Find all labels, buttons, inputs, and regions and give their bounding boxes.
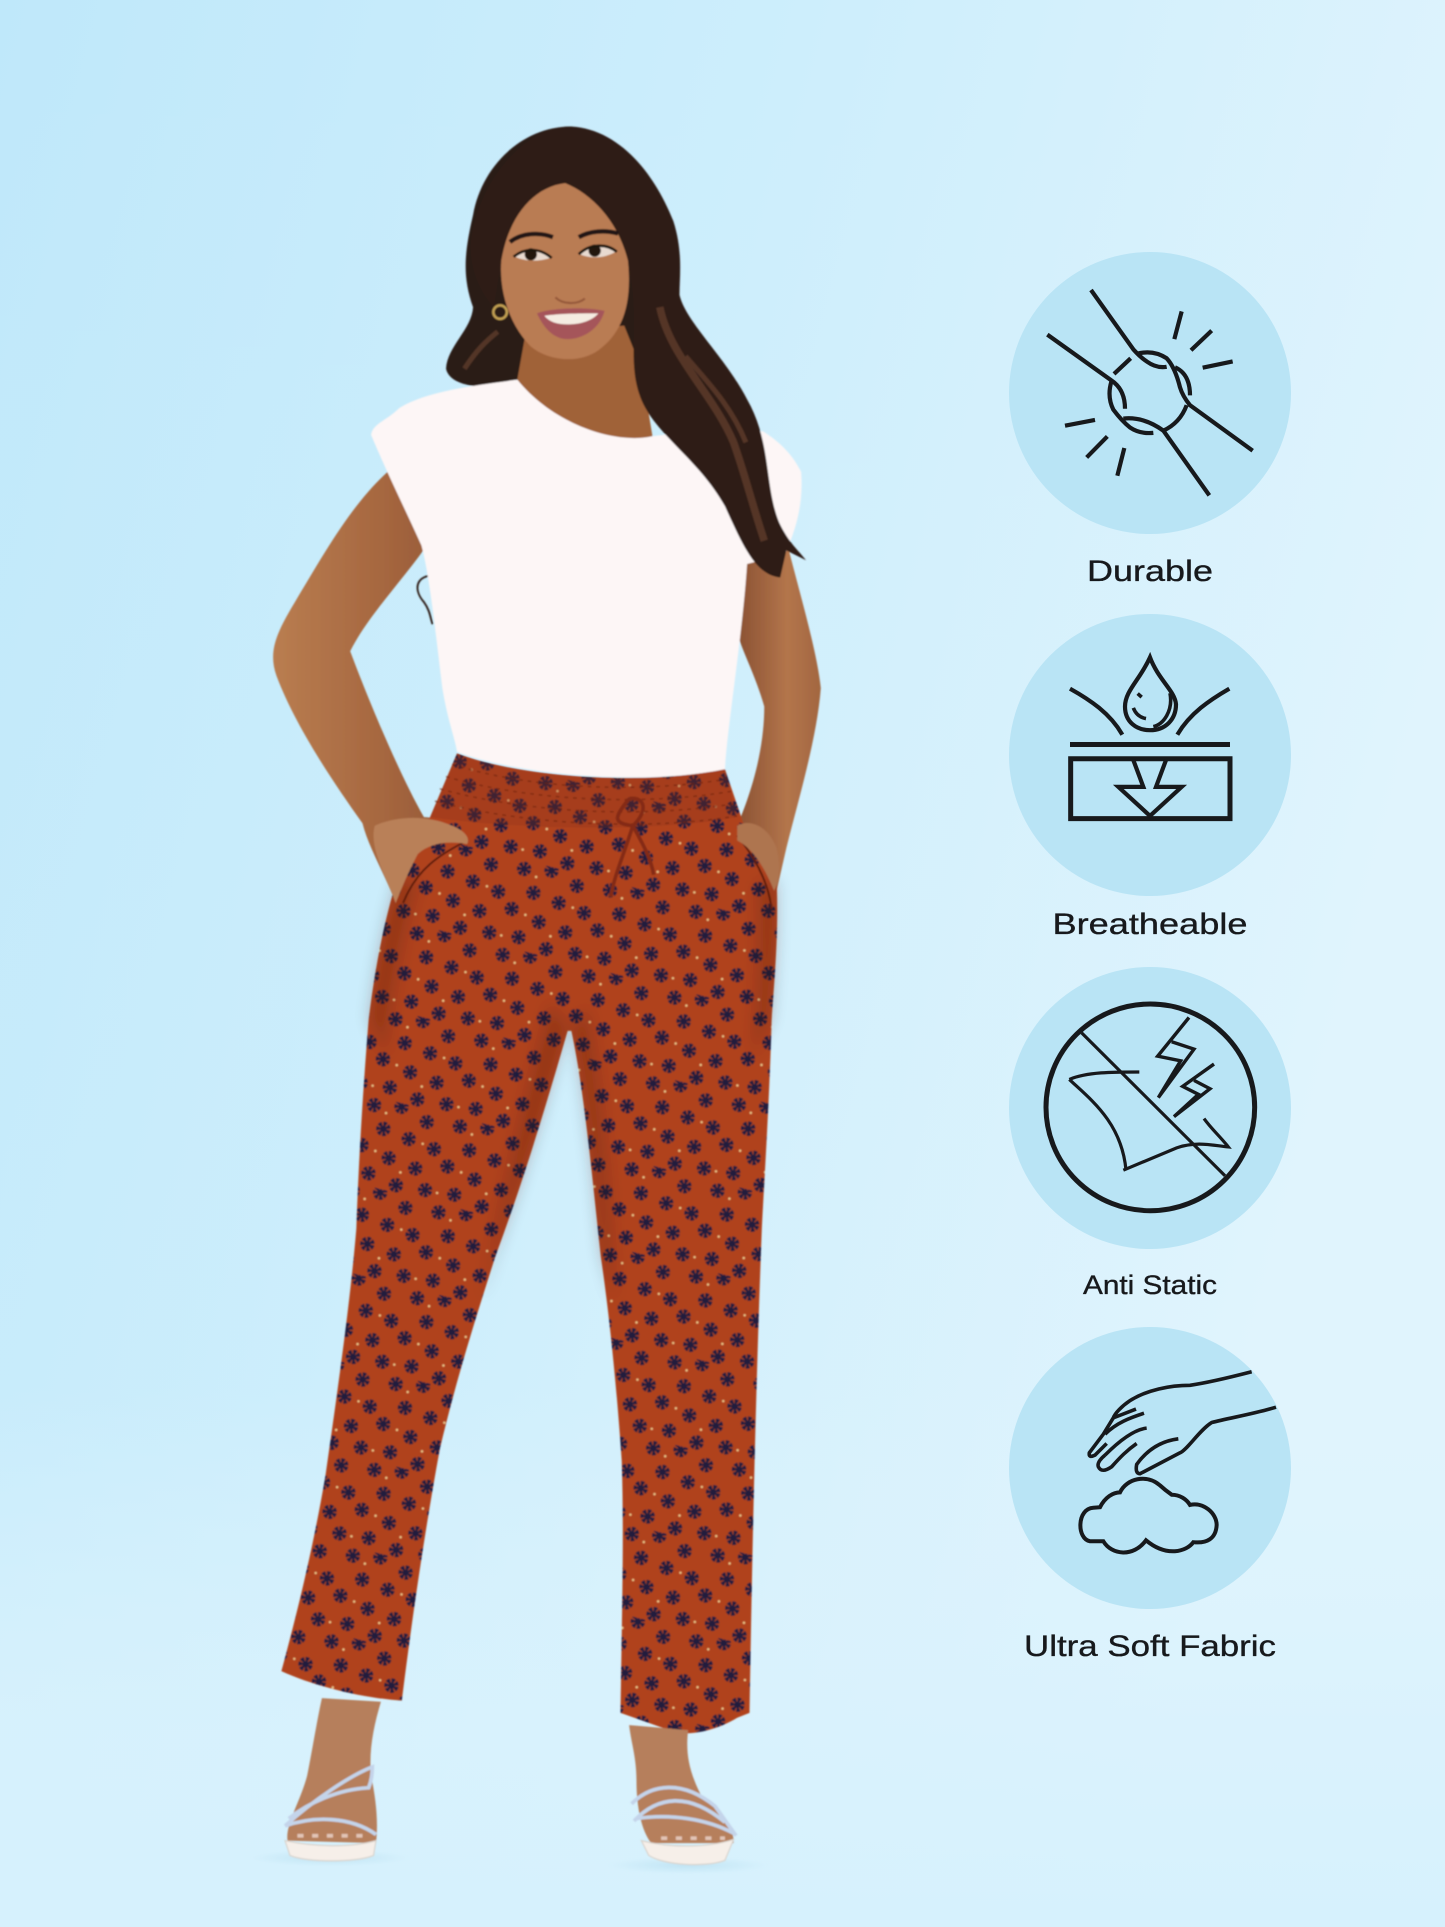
ultra soft circle (1009, 1327, 1291, 1609)
icon: no static (1046, 1004, 1255, 1211)
neck (517, 326, 652, 439)
durable circle (1009, 252, 1291, 534)
anti static circle (1009, 967, 1291, 1249)
left foot (287, 1698, 381, 1843)
smile (537, 308, 605, 339)
hair highlights (464, 307, 764, 541)
pants shape (281, 753, 777, 1733)
earring (493, 305, 507, 319)
model wearing printed pants (249, 127, 821, 1874)
nose (555, 297, 585, 303)
printed pants (281, 753, 777, 1733)
toenails (297, 1836, 725, 1838)
hand in pocket right (737, 823, 779, 891)
pants fabric shading (369, 872, 777, 1302)
hair back (446, 127, 657, 405)
feature: durable (1009, 252, 1291, 588)
label: breatheable: Breatheable (1052, 908, 1248, 941)
hand in pocket left (374, 818, 468, 903)
left arm (273, 447, 469, 903)
label: anti static: Anti Static (1083, 1270, 1217, 1300)
icon: clasped hands (1047, 290, 1253, 495)
right arm (737, 541, 821, 891)
right foot (629, 1725, 734, 1843)
right sandal (632, 1787, 736, 1865)
pocket lines (403, 836, 772, 909)
feature: ultra soft fabric (1009, 1327, 1291, 1663)
label: durable: Durable (1087, 555, 1213, 588)
floor shadows (249, 1849, 768, 1874)
left sandal (285, 1767, 376, 1861)
face (501, 183, 629, 359)
elastic waistband (430, 753, 737, 828)
eyes (514, 245, 617, 261)
stray hair strands (417, 575, 433, 624)
icon: hand over cloud (1080, 1372, 1276, 1552)
icon: water drop and fabric (1070, 657, 1230, 819)
hair front (471, 127, 806, 578)
white t-shirt (371, 380, 802, 777)
feature: anti static (1009, 967, 1291, 1300)
eyebrows (510, 231, 618, 242)
breatheable circle (1009, 614, 1291, 896)
feature: breatheable (1009, 614, 1291, 941)
label: ultra soft fabric: Ultra Soft Fabric (1024, 1630, 1276, 1663)
drawstring (611, 798, 654, 897)
